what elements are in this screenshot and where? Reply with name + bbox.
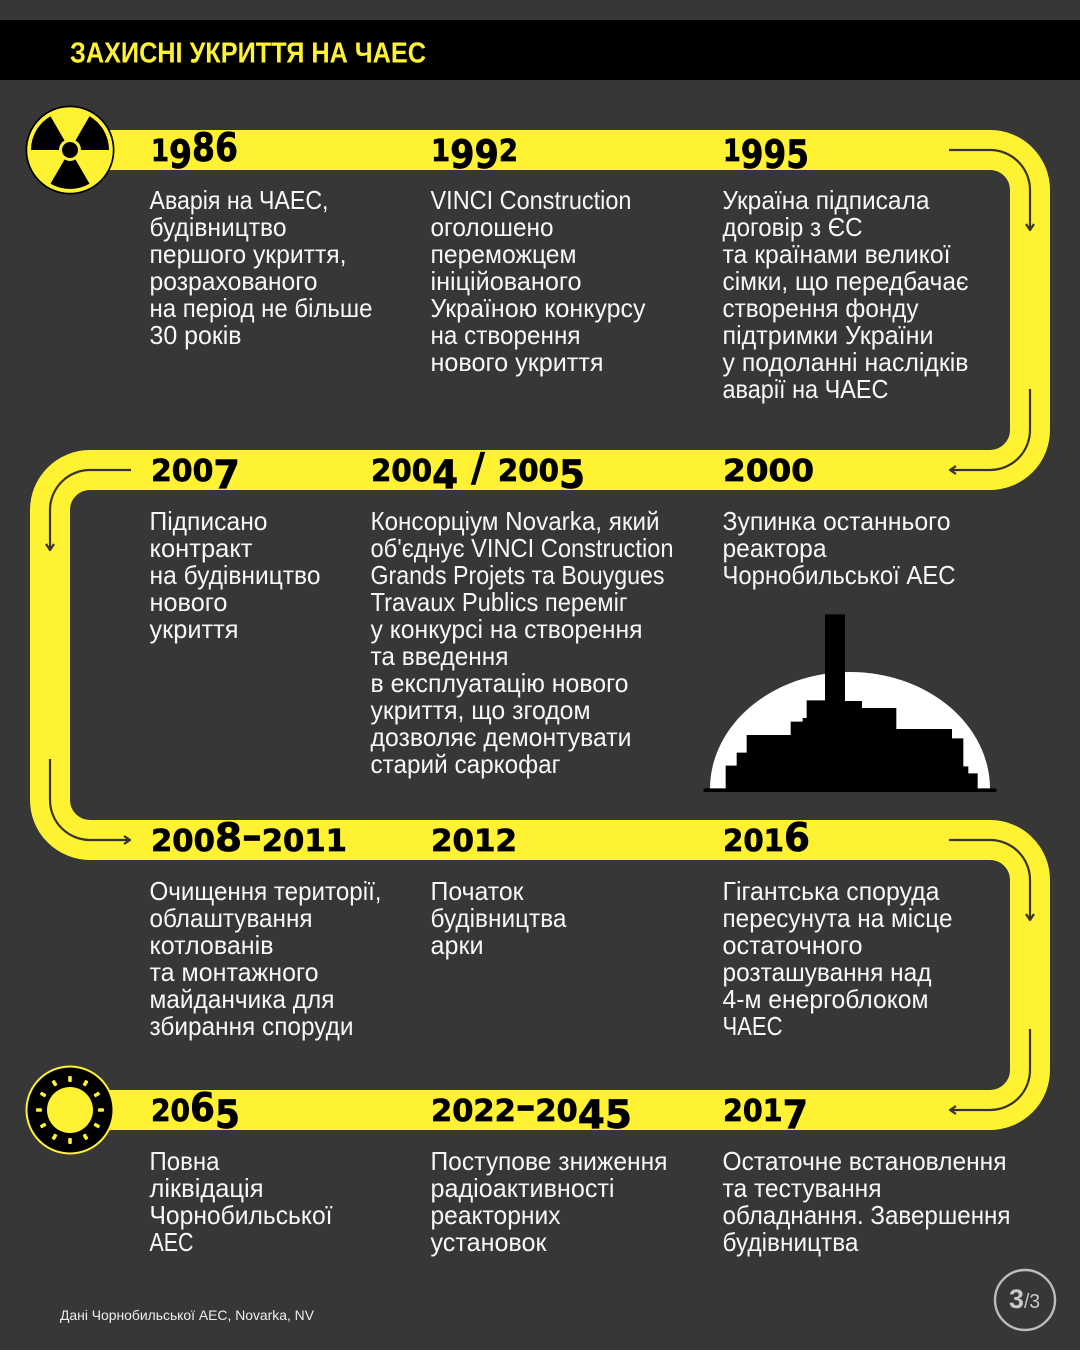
text: 2022-2045 event: радіоактивності (430, 1173, 614, 1203)
year 1986: 9 (169, 133, 192, 178)
text: 2007 event: укриття (150, 614, 238, 644)
text: 2065 event (150, 1146, 332, 1257)
page number badge: /3 (1024, 1291, 1040, 1313)
text: 2000 event (722, 506, 956, 590)
year 2022-2045: – (516, 1084, 535, 1129)
text: 1986 event: на період не більше (150, 293, 372, 323)
text: 2022-2045 event (430, 1146, 668, 1257)
text: 2008-2011 event: збирання споруди (150, 1011, 354, 1041)
text: 1995 event: підтримки України (722, 320, 934, 350)
text: 2016 event: ЧАЕС (722, 1011, 782, 1041)
year 1986: 86 (192, 126, 238, 171)
text: 2016 event (722, 876, 952, 1041)
panel: 2012 (430, 824, 567, 960)
page number badge (995, 1270, 1055, 1330)
year 2004 / 2005: 200 (498, 454, 559, 489)
text: 2000 event: Зупинка останнього (722, 506, 950, 536)
text: 2017 event: будівництва (722, 1227, 859, 1257)
icon: sun badge (26, 1066, 114, 1154)
direction arrows on ribbon (46, 150, 1034, 1114)
text: 1995 event: аварії на ЧАЕС (722, 374, 888, 404)
source note: Дані Чорнобильської АЕС, Novarka, NV (60, 1307, 315, 1323)
text: 2012 event (430, 876, 567, 960)
panel: 1986 (150, 126, 372, 350)
text: 1992 event: переможцем (430, 239, 576, 269)
year 2022-2045: 2022 (431, 1094, 516, 1129)
text: 2017 event (722, 1146, 1010, 1257)
text: 1995 event: Україна підписала (722, 185, 930, 215)
text: 1986 event: будівництво (150, 212, 286, 242)
panel: 2022-2045 (430, 1084, 668, 1257)
text: 2016 event: розташування над (722, 957, 932, 987)
text: 2022-2045 event: реакторних (430, 1200, 560, 1230)
year 1986: 1 (151, 134, 169, 169)
text: 2008-2011 event: облаштування (150, 903, 312, 933)
icon: radiation badge (26, 106, 114, 194)
panel: 2004-2005 (370, 446, 674, 779)
text: 2007 event: нового (150, 587, 228, 617)
year 2065: 206 (151, 1086, 217, 1131)
panel: 1992 (430, 133, 646, 377)
text: 1992 event: на створення (430, 320, 580, 350)
panel: 2007 (150, 453, 320, 644)
text: 2017 event: обладнання. Завершення (722, 1200, 1010, 1230)
year 2022-2045: 45 (578, 1093, 632, 1138)
year 2017: 201 (723, 1094, 783, 1129)
text: 1995 event: створення фонду (722, 293, 918, 323)
text: 1986 event: розрахованого (150, 266, 318, 296)
text: 2065 event: Повна (150, 1146, 220, 1176)
year 2008-2011: 2011 (262, 824, 347, 859)
text: 2022-2045 event: Поступове зниження (430, 1146, 668, 1176)
year 2007: 7 (213, 453, 240, 498)
year 1995: 995 (741, 133, 809, 178)
text: 2008-2011 event: Очищення території, (150, 876, 382, 906)
year 2004 / 2005: 5 (559, 453, 585, 498)
text: 2012 event: будівництва (430, 903, 567, 933)
text: 2065 event: АЕС (150, 1227, 194, 1257)
header band with title: ЗАХИСНІ УКРИТТЯ НА ЧАЕС (70, 38, 426, 70)
text: 2004-2005 event: Travaux Publics переміг (370, 587, 628, 617)
icon: reactor sarcophagus under arch (703, 614, 997, 792)
year 2000: 2000 (723, 454, 814, 489)
text: 2017 event: Остаточне встановлення (722, 1146, 1006, 1176)
text: 2017 event: та тестування (722, 1173, 882, 1203)
text: 1992 event: оголошено (430, 212, 554, 242)
year 1992: 99 (450, 133, 499, 178)
text: 2004-2005 event: дозволяє демонтувати (370, 722, 632, 752)
text: 2004-2005 event: об'єднує VINCI Construction (370, 533, 674, 563)
year 2065: 5 (215, 1093, 240, 1138)
panel: 1995 (722, 133, 968, 404)
year 2008-2011: 2008 (151, 816, 242, 861)
text: 1986 event: Аварія на ЧАЕС, (150, 185, 328, 215)
year 2004 / 2005: / (458, 446, 498, 491)
text: 2000 event: реактора (722, 533, 827, 563)
panel: 2065 (150, 1086, 332, 1257)
year 1995: 1 (723, 134, 741, 169)
text: 1986 event (150, 185, 372, 350)
text: 2007 event (150, 506, 320, 644)
text: 2012 event: арки (430, 930, 484, 960)
text: 2008-2011 event: майданчика для (150, 984, 334, 1014)
text: 2008-2011 event: котлованів (150, 930, 274, 960)
panel: 2008-2011 (150, 814, 382, 1041)
text: 1986 event: першого укриття, (150, 239, 346, 269)
year 2007: 200 (151, 454, 213, 489)
text: 2008-2011 event (150, 876, 382, 1041)
year 2012: 2012 (431, 824, 517, 859)
text: 2004-2005 event: в експлуатацію нового (370, 668, 628, 698)
text: 1995 event (722, 185, 968, 404)
text: 2016 event: пересунута на місце (722, 903, 952, 933)
text: 2007 event: Підписано (150, 506, 268, 536)
timeline ribbon (50, 150, 1030, 1110)
text: 2004-2005 event: укриття, що згодом (370, 695, 590, 725)
text: 1992 event (430, 185, 646, 377)
text: 2065 event: ліквідація (150, 1173, 264, 1203)
text: 2004-2005 event: та введення (370, 641, 508, 671)
text: 2000 event: Чорнобильської АЕС (722, 560, 956, 590)
text: 2016 event: 4-м енергоблоком (722, 984, 928, 1014)
text: 2004-2005 event (370, 506, 674, 779)
year 1992: 2 (499, 134, 518, 169)
year 2022-2045: 20 (535, 1094, 578, 1129)
text: 1986 event: 30 років (150, 320, 242, 350)
year 2004 / 2005: 4 (432, 453, 458, 498)
header band with title (0, 20, 1080, 80)
text: 1995 event: у подоланні наслідків (722, 347, 968, 377)
text: 2016 event: остаточного (722, 930, 862, 960)
text: 2007 event: контракт (150, 533, 253, 563)
text: 2022-2045 event: установок (430, 1227, 547, 1257)
text: 2008-2011 event: та монтажного (150, 957, 318, 987)
year 2004 / 2005: 200 (371, 454, 432, 489)
panel: 2016 (722, 816, 952, 1041)
text: 2012 event: Початок (430, 876, 524, 906)
text: 1992 event: нового укриття (430, 347, 604, 377)
year 2016: 2016 (723, 816, 810, 861)
text: 2004-2005 event: старий саркофаг (370, 749, 560, 779)
year 1992: 1 (431, 134, 450, 169)
text: 1992 event: Україною конкурсу (430, 293, 646, 323)
text: 2007 event: на будівництво (150, 560, 320, 590)
text: 1992 event: ініційованого (430, 266, 582, 296)
panel: 2000 (722, 454, 956, 590)
text: 2065 event: Чорнобильської (150, 1200, 332, 1230)
text: 1995 event: сімки, що передбачає (722, 266, 968, 296)
text: 2016 event: Гігантська споруда (722, 876, 940, 906)
page number badge: 3 (1009, 1284, 1024, 1314)
panel: 2017 (722, 1093, 1010, 1257)
text: 1995 event: договір з ЄС (722, 212, 862, 242)
text: 1995 event: та країнами великої (722, 239, 950, 269)
text: 2004-2005 event: Grands Projets та Bouygues (370, 560, 664, 590)
text: 2004-2005 event: Консорціум Novarka, який (370, 506, 660, 536)
year 2008-2011: – (242, 814, 262, 859)
text: 2004-2005 event: у конкурсі на створення (370, 614, 642, 644)
text: 1992 event: VINCI Construction (430, 185, 632, 215)
year 2017: 7 (783, 1093, 808, 1138)
